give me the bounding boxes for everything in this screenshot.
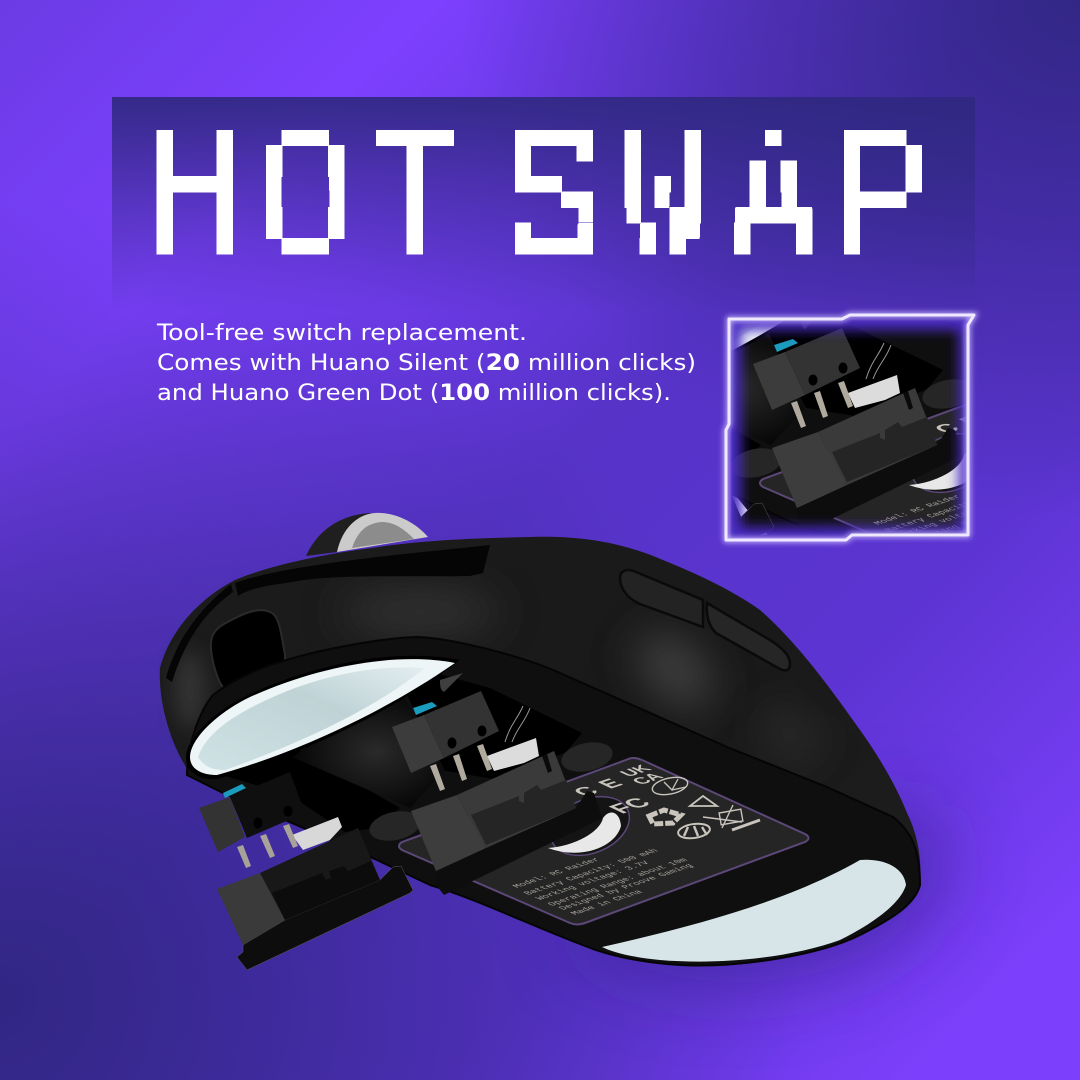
- description text: Tool-free switch replacement.: [156, 320, 527, 346]
- rear glide skate: [602, 860, 906, 962]
- sensor ring: [542, 786, 638, 866]
- lower microswitch: [199, 772, 413, 970]
- underside left recess: [205, 745, 400, 832]
- regulatory marks: [649, 774, 760, 840]
- mouse illustration: [160, 513, 920, 970]
- lower housing dark panel: [272, 861, 380, 920]
- certification letters: E: [592, 776, 628, 791]
- upper housing dark panel: [471, 780, 576, 845]
- title: HOT SWAP: P: [833, 90, 929, 294]
- label plate text: Battery Capacity: 500 mAh: [521, 848, 661, 896]
- label plate text: Designed by Proove Gaming: [556, 863, 696, 911]
- title: HOT SWAP: W: [625, 104, 704, 311]
- lower housing top face: [260, 828, 380, 920]
- title: HOT SWAP: O: [256, 92, 355, 295]
- lower housing left face: [217, 873, 285, 945]
- lower pin holes: [254, 806, 292, 828]
- side button 1: [620, 570, 703, 627]
- label plate text: Operating Range: about 10m: [545, 857, 691, 907]
- lower housing flange: [237, 866, 413, 970]
- label plate text: [510, 848, 696, 916]
- label plate text: Working voltage: 3.7V: [533, 859, 653, 901]
- upper connector: [487, 738, 539, 771]
- upper housing top face: [457, 751, 576, 848]
- label plate text: Made in China: [568, 889, 646, 916]
- certification letters: CA: [627, 771, 668, 787]
- upper housing notch: [542, 754, 552, 773]
- upper wires: [505, 706, 530, 742]
- certification letters: FC: [603, 795, 658, 817]
- inset contents: [731, 320, 969, 537]
- label plate text: Model: RC Raider: [510, 856, 603, 889]
- grey wedge by skate: [440, 673, 463, 692]
- shell highlights: [174, 594, 823, 767]
- inset frame glow: [726, 315, 974, 540]
- title: HOT SWAP: A: [730, 91, 817, 295]
- top glide skate: [186, 656, 460, 779]
- lower blue plunger: [223, 784, 246, 798]
- front lip strip: [166, 584, 233, 682]
- mouse drop shadow: [560, 800, 945, 984]
- upper switch front face: [424, 691, 499, 758]
- certification letters: [567, 763, 668, 817]
- mouse body: [160, 537, 920, 965]
- description text: [156, 320, 696, 406]
- front port: [211, 610, 285, 690]
- upper pins: [430, 744, 492, 791]
- inset glowing frame: [726, 315, 974, 540]
- lower connector: [292, 817, 342, 850]
- title: HOT SWAP: S: [498, 91, 610, 295]
- upper housing flange: [436, 791, 602, 895]
- foot: left: [367, 807, 423, 845]
- underside centre panel: [292, 695, 445, 808]
- underside: [187, 637, 920, 965]
- detail inset: [719, 308, 980, 547]
- title band: [112, 97, 975, 312]
- upper housing left face: [411, 795, 486, 871]
- upper switch side face: [392, 715, 444, 773]
- upper microswitch: [392, 691, 602, 895]
- title: HOT SWAP: [147, 90, 929, 311]
- lower switch front face: [230, 772, 305, 838]
- title: HOT SWAP: T: [375, 90, 455, 295]
- side button 2: [707, 603, 790, 670]
- description text: and Huano Green Dot ( 100 million clicks).: [157, 380, 671, 406]
- top vent band: [235, 545, 490, 596]
- foot: right: [559, 738, 615, 776]
- upper pin holes: [448, 726, 486, 748]
- underside right recess: [403, 670, 582, 780]
- upper blue plunger: [413, 702, 437, 715]
- scroll wheel: [306, 513, 428, 556]
- certification letters: UK: [615, 763, 657, 779]
- certification letters: C: [567, 783, 605, 799]
- title: HOT SWAP: H: [147, 92, 245, 295]
- description text: Comes with Huano Silent ( 20 million clicks): [157, 350, 696, 376]
- lower pins: [237, 824, 298, 868]
- lower switch side face: [199, 797, 245, 852]
- label plate: [399, 758, 808, 924]
